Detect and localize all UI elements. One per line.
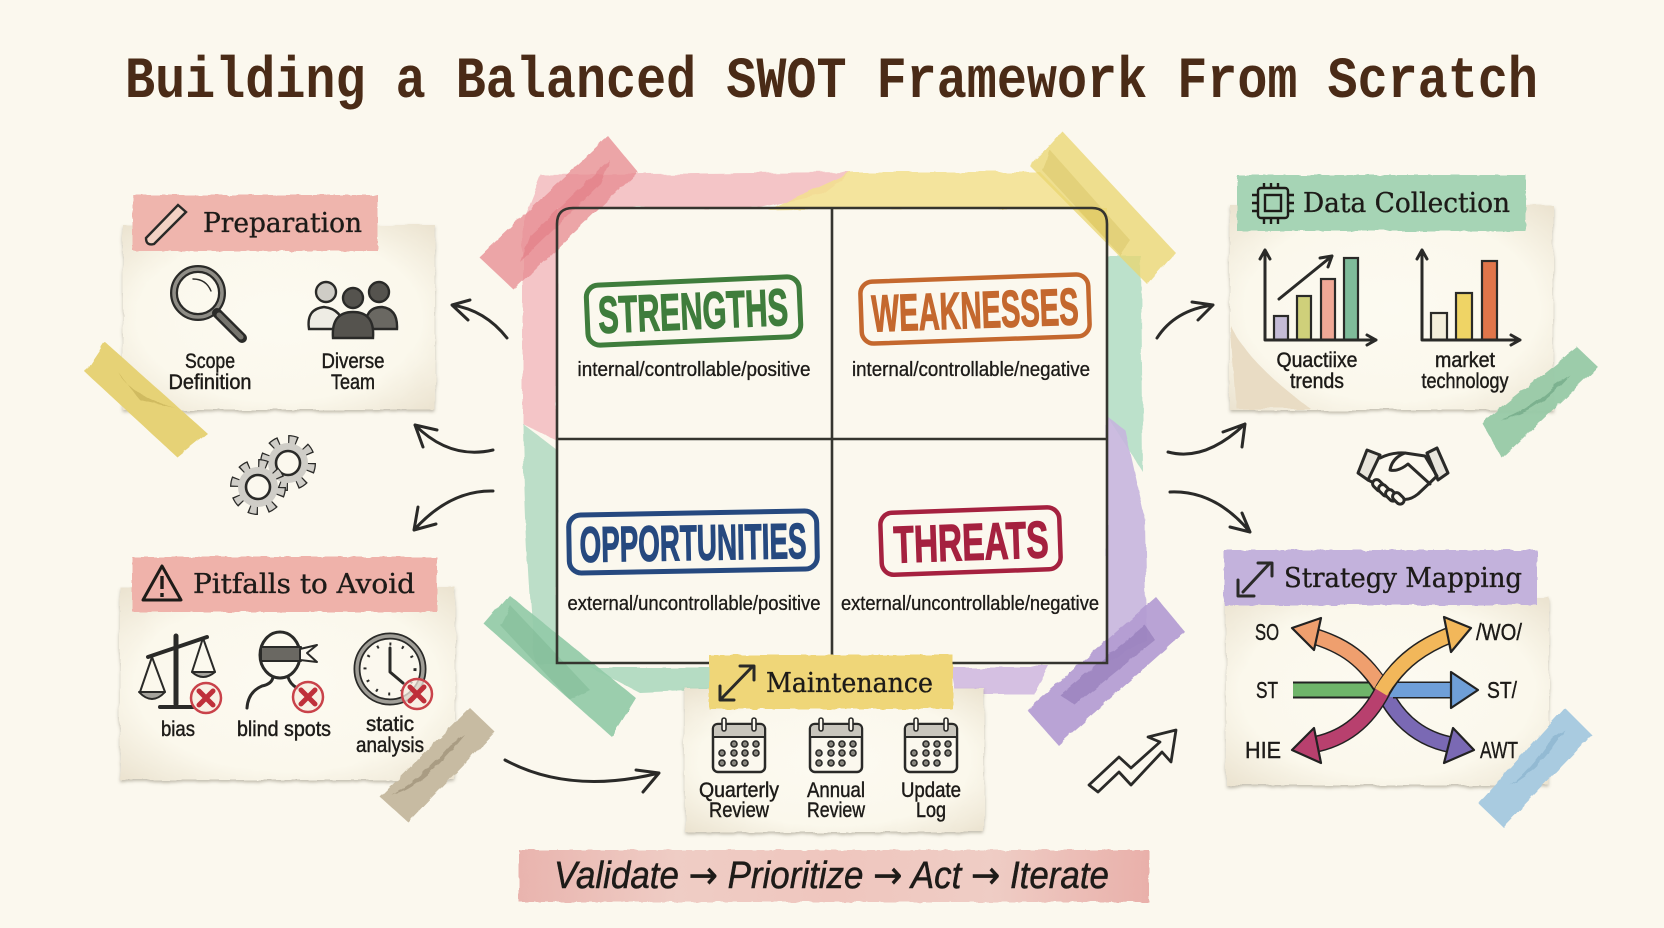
item: update log: Update <box>901 779 961 802</box>
item: annual review <box>807 718 866 822</box>
tape: purple <box>1027 597 1185 745</box>
item: quarterly review: Quarterly <box>699 779 779 802</box>
stain <box>1230 325 1310 408</box>
label: blind spots: blind spots <box>237 718 331 741</box>
labels: strategy left: SO <box>1255 619 1279 645</box>
matrix grid <box>557 208 1107 663</box>
heading: maintenance <box>709 655 953 709</box>
labels: strategy right: /WO/ <box>1476 619 1523 645</box>
chart: crossing arrows <box>1292 617 1478 763</box>
panel: strategy mapping <box>1224 550 1592 827</box>
heading: pitfalls <box>132 557 437 612</box>
heading: pitfalls: Pitfalls to Avoid <box>193 569 415 600</box>
icon: blind spots cross <box>293 682 323 712</box>
item: annual review: Annual <box>807 779 865 802</box>
heading: data collection <box>1237 175 1526 231</box>
icon: gears <box>235 440 311 510</box>
labels: strategy right: ST/ <box>1487 677 1518 703</box>
label: quantitative trends: Quactiixe <box>1276 349 1358 372</box>
label: scope definition: Scope <box>185 350 235 373</box>
label: scope definition <box>168 350 252 394</box>
heading: strategy mapping <box>1224 550 1537 605</box>
item: annual review: Review <box>807 799 866 822</box>
watercolor frame <box>523 172 1147 695</box>
icon: handshake <box>1358 448 1448 506</box>
labels: strategy left <box>1245 619 1281 763</box>
icon: clock <box>357 636 423 702</box>
arrow: to data collection lower <box>1168 424 1245 454</box>
panel: preparation <box>85 195 435 457</box>
quadrant: strengths: STRENGTHS <box>597 279 789 345</box>
label: quantitative trends <box>1276 349 1358 393</box>
tape: tan <box>380 708 495 822</box>
label: static analysis <box>356 713 424 757</box>
arrow: to preparation <box>452 300 507 338</box>
label: market technology: market <box>1435 349 1495 372</box>
tape: blue <box>1478 708 1592 827</box>
heading: strategy mapping: Strategy Mapping <box>1284 563 1522 594</box>
label: market technology <box>1422 349 1509 393</box>
item: update log <box>901 718 961 822</box>
tape: yellow <box>1030 131 1175 284</box>
heading: preparation <box>133 195 378 251</box>
icon: magnifier <box>174 269 242 338</box>
arrow: to maintenance <box>505 760 659 792</box>
label: static analysis: analysis <box>356 734 424 757</box>
label: scope definition: Definition <box>168 371 252 394</box>
quadrant: opportunities: OPPORTUNITIES <box>579 513 807 573</box>
icon: bias cross <box>191 683 221 713</box>
quadrant: strengths: internal/controllable/positive <box>578 359 810 381</box>
tape: green <box>484 595 636 737</box>
panel: pitfalls to avoid <box>120 557 495 822</box>
quadrant: threats <box>841 507 1099 615</box>
tape: yellow on preparation <box>85 342 207 457</box>
arrow: to strategy mapping <box>1170 492 1250 532</box>
label: diverse team: Diverse <box>322 350 384 373</box>
labels: strategy left: ST <box>1256 677 1278 703</box>
arrow: to pitfalls <box>414 491 493 530</box>
heading: preparation: Preparation <box>203 208 362 239</box>
labels: strategy left: HIE <box>1245 737 1281 763</box>
icon: blindfolded person <box>247 632 317 708</box>
label: diverse team <box>322 350 384 394</box>
quadrant: weaknesses: WEAKNESSES <box>871 278 1080 344</box>
labels: strategy right: AWT <box>1480 737 1518 763</box>
icon: zigzag growth arrow <box>1089 730 1176 792</box>
label: bias: bias <box>161 718 195 741</box>
icon: team <box>309 282 397 338</box>
quadrant: opportunities <box>568 511 820 615</box>
label: quantitative trends: trends <box>1290 370 1344 393</box>
panel: maintenance <box>685 655 984 832</box>
arrow: to data collection <box>1157 302 1213 338</box>
quadrant: threats: external/uncontrollable/negative <box>841 593 1099 615</box>
item: quarterly review: Review <box>709 799 770 822</box>
quadrant: weaknesses: internal/controllable/negative <box>852 359 1090 381</box>
heading: maintenance: Maintenance <box>766 668 933 699</box>
item: update log: Log <box>916 799 946 822</box>
label: static analysis: static <box>366 713 414 736</box>
quadrant: strengths <box>578 276 810 381</box>
icon: scales <box>139 636 215 707</box>
quadrant: opportunities: external/uncontrollable/positive <box>568 593 820 615</box>
panel: data collection <box>1230 175 1598 458</box>
item: quarterly review <box>699 718 779 822</box>
banner: process steps: Validate → Prioritize → Act → Iterate <box>554 853 1109 897</box>
label: market technology: technology <box>1422 370 1509 393</box>
arrow: to preparation lower <box>415 425 493 452</box>
panel: SWOT matrix <box>479 131 1185 745</box>
labels: strategy right <box>1476 619 1523 763</box>
chart: market technology <box>1417 250 1520 345</box>
icon: static analysis cross <box>402 679 432 709</box>
heading: data collection: Data Collection <box>1303 188 1510 219</box>
tape: red <box>479 136 638 290</box>
chart: quantitative trends <box>1260 250 1376 345</box>
tape: green on data collection <box>1482 347 1598 458</box>
label: diverse team: Team <box>331 371 375 394</box>
quadrant: threats: THREATS <box>893 511 1050 575</box>
quadrant: weaknesses <box>852 274 1090 381</box>
